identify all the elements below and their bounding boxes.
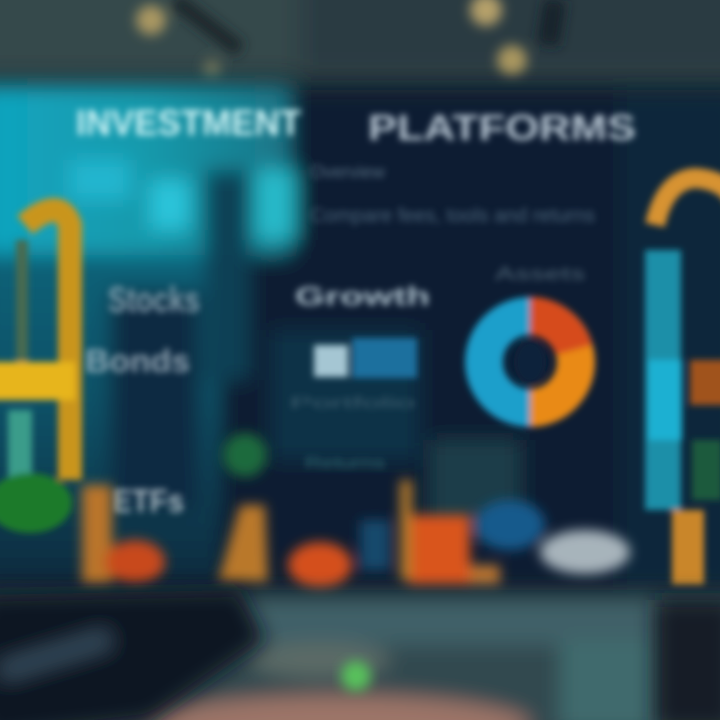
title: INVESTMENT [76,102,301,143]
main display wall [0,85,720,590]
donut chart [484,264,585,408]
left stats block: Bonds [85,343,190,379]
ceiling background [0,0,720,80]
floor [0,595,720,720]
small green plant [341,661,371,691]
left stats block [85,279,200,519]
subtitle text [310,162,595,227]
right orange structure [645,178,720,585]
bottom bar chart [82,433,630,588]
sofa [0,590,720,720]
center stats block: Returns [305,455,385,472]
center stats block: Growth [295,281,430,311]
subtitle text: Overview [310,162,386,182]
subtitle text: Compare fees, tools and returns [310,205,595,227]
left stats block: ETFs [112,483,184,519]
title [76,102,636,148]
center stats block [290,281,430,472]
left orange structure [0,210,75,533]
donut chart: Assets [495,264,585,284]
ceiling lights [136,0,555,77]
title: PLATFORMS [368,107,636,148]
left stats block: Stocks [108,279,200,320]
center stats block: Portfolio [290,395,415,412]
